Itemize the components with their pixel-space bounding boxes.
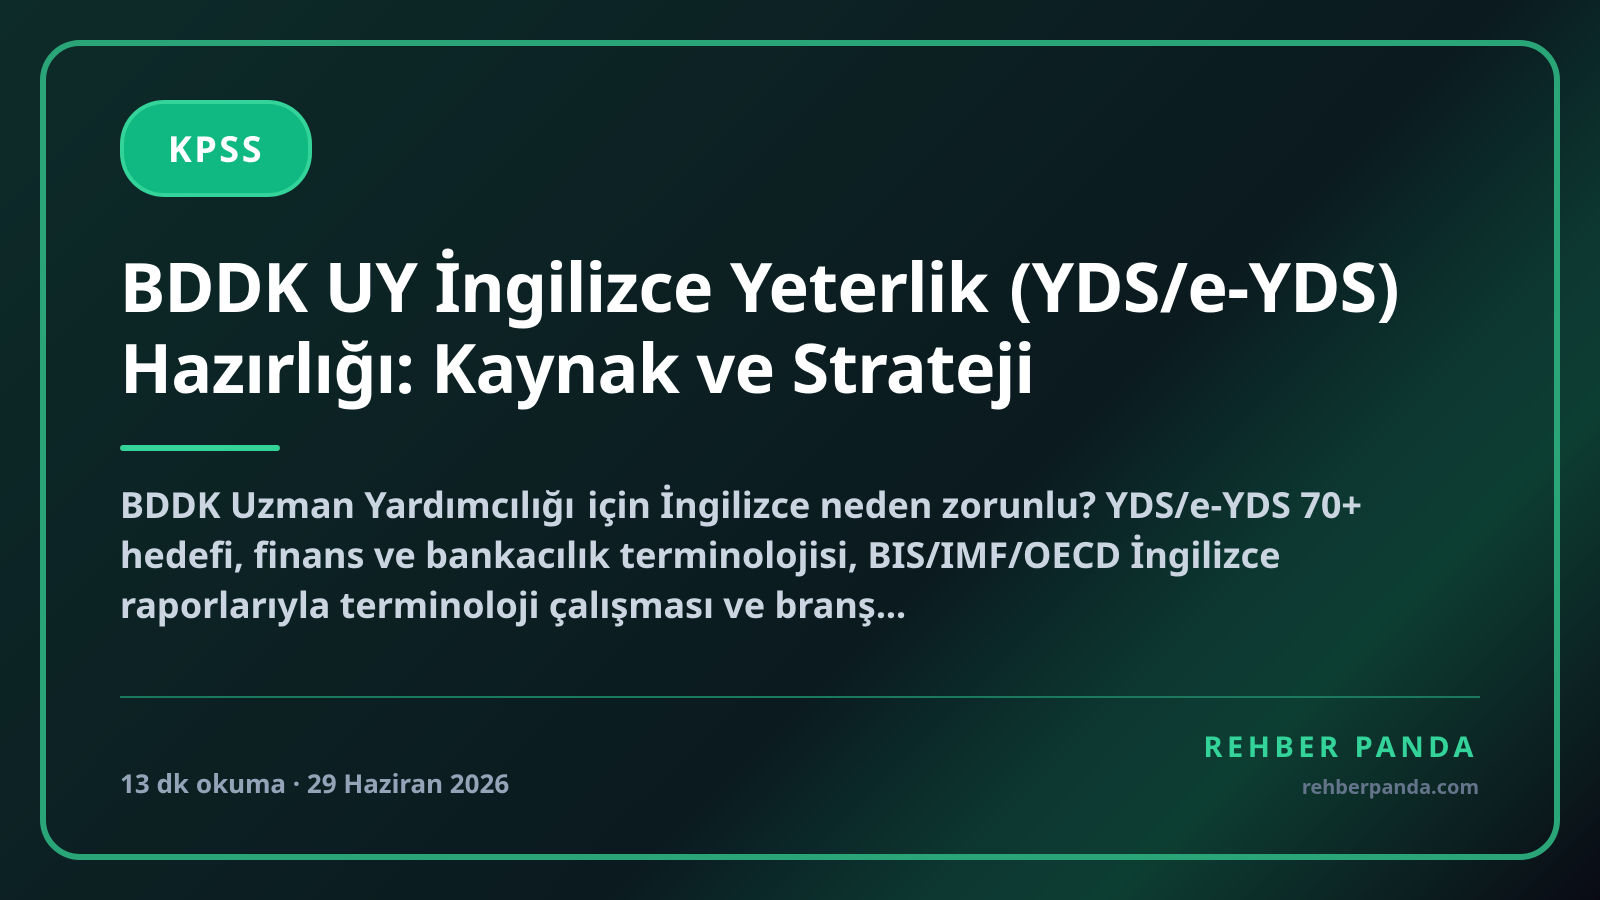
title: BDDK UY İngilizce Yeterlik (YDS/e-YDS) <box>120 239 1399 332</box>
description text: raporlarıyla terminoloji çalışması ve branş... <box>120 580 906 629</box>
badge: KPSS: KPSS <box>168 124 264 173</box>
reading time and date: 13 dk okuma · 29 Haziran 2026 <box>120 765 509 801</box>
description text <box>120 480 1362 629</box>
title: Hazırlığı: Kaynak ve Strateji <box>120 320 1034 413</box>
description text: hedefi, finans ve bankacılık terminolojisi, BIS/IMF/OECD İngilizce <box>120 530 1281 579</box>
badge: KPSS <box>120 100 312 197</box>
brand name: REHBER PANDA <box>1204 727 1478 766</box>
accent bar <box>120 445 280 451</box>
title <box>120 239 1399 413</box>
description text: BDDK Uzman Yardımcılığı için İngilizce neden zorunlu? YDS/e-YDS 70+ <box>120 480 1362 529</box>
website url: rehberpanda.com <box>1302 773 1479 800</box>
divider <box>120 696 1480 698</box>
